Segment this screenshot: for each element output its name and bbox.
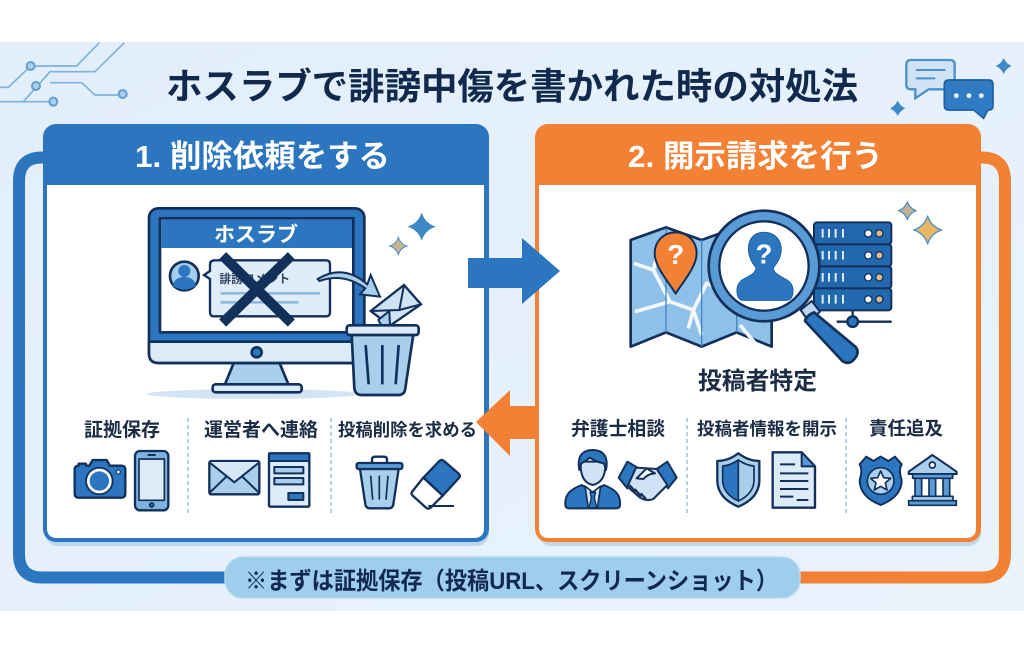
illustration: monitor and trash [147,208,436,399]
icon: chat bubbles [890,58,1012,118]
label: 投稿者特定: 投稿者特定 [698,368,817,395]
arrow: step 2 back to step 1 [476,390,537,456]
illustration: map, magnifier and server: ? [756,238,772,269]
illustration: map, magnifier and server [631,202,942,363]
arrow: step 1 to step 2 [468,238,560,304]
icon: circuit decoration [0,43,127,106]
panel: 2 disclosure request [535,124,981,546]
panel: 1 removal request [43,124,489,546]
heading: panel 2: 2. 開示請求を行う [628,139,883,174]
label: 責任追及: 責任追及 [869,418,943,439]
label: 運営者へ連絡: 運営者へ連絡 [204,419,318,441]
callout: save evidence first [225,557,800,598]
label: 弁護士相談: 弁護士相談 [571,417,665,439]
callout: save evidence first: ※まずは証拠保存（投稿URL、スクリーンショット） [245,568,778,595]
connector: orange loop [790,158,1005,578]
label: 投稿削除を求める: 投稿削除を求める [338,420,477,440]
illustration: monitor and trash: 誹謗コメント [219,271,290,286]
icons: lawyer handshake shield document badge court [565,450,957,508]
connector: blue loop [19,158,240,578]
heading: panel 1: 1. 削除依頼をする [135,139,390,174]
illustration: monitor and trash: ホスラブ [214,223,298,247]
icons: camera phone mail form trash eraser [75,451,460,510]
label: 投稿者情報を開示: 投稿者情報を開示 [697,419,837,439]
title: ホスラブで誹謗中傷を書かれた時の対処法 [166,66,858,107]
illustration: map, magnifier and server: ? [667,239,684,270]
label: 証拠保存: 証拠保存 [84,419,160,441]
